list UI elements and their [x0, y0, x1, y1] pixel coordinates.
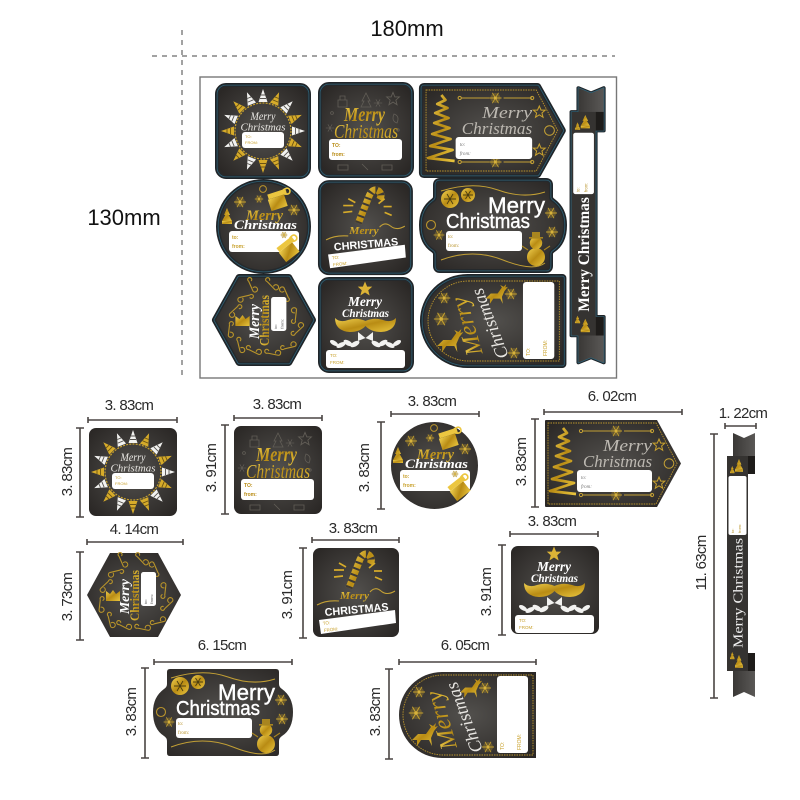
dimension: tree ring width: 3. 83cm	[105, 397, 153, 414]
dimension: round width	[391, 393, 479, 417]
dimension: arch height: 3. 83cm	[367, 688, 384, 736]
sticker: plaque with snowman: Merry	[218, 680, 275, 705]
sheet sticker: long strip	[572, 88, 604, 363]
sheet sticker: gold script square: TO:	[332, 143, 341, 149]
sticker: arch with reindeer: FROM:	[517, 734, 523, 750]
sticker: pentagon tag with ribbon tree	[545, 420, 681, 507]
dimension: round height: 3. 83cm	[356, 444, 373, 492]
sheet sticker: round gifts: from:	[232, 244, 245, 250]
sheet sticker: tree ring: FROM:	[245, 140, 258, 145]
sheet sticker: arch with reindeer	[424, 278, 562, 364]
dimension: pentagon width: 6. 02cm	[588, 388, 636, 405]
dimension: plaque width	[154, 637, 292, 665]
sticker: gold script square: from:	[244, 492, 257, 498]
dimension: round height	[356, 422, 385, 509]
sticker: moustache: Christmas	[531, 571, 578, 585]
dimension: plaque height	[123, 668, 149, 758]
sticker: arch with reindeer: Christmas	[442, 679, 487, 756]
sheet sticker: plaque with snowman: Christmas	[446, 211, 530, 233]
sheet sticker: gold script square: Merry	[343, 104, 385, 126]
dimension: script square width: 3. 83cm	[253, 396, 301, 413]
sheet sticker: arch with reindeer: Merry	[446, 293, 489, 359]
dimension: hexagon width	[87, 521, 183, 545]
sheet sticker: moustache	[322, 281, 410, 369]
panel: full sticker sheet	[200, 77, 616, 378]
sheet sticker: hexagon: Merry	[247, 303, 263, 340]
sticker: candy cane: Merry	[339, 590, 369, 602]
dimension: moustache height	[478, 545, 506, 635]
dimension: moustache width: 3. 83cm	[528, 513, 576, 530]
sticker: long strip: Merry Christmas	[732, 538, 746, 648]
sheet sticker: hexagon	[216, 277, 312, 362]
dimension: hexagon height	[59, 552, 84, 640]
dimension: strip height	[693, 434, 718, 698]
sticker: hexagon: Christmas	[127, 570, 142, 621]
sticker: tree ring: FROM:	[115, 481, 128, 486]
sheet sticker: gold script square: from:	[332, 152, 345, 158]
sheet sticker: plaque with snowman: Merry	[488, 193, 545, 218]
sticker: tree ring: Merry	[120, 450, 146, 464]
sheet sticker: round gifts: Christmas	[234, 217, 297, 232]
sheet sticker: gold script square	[322, 86, 410, 174]
dimension: arch width: 6. 05cm	[441, 637, 489, 654]
dimension: arch width	[399, 637, 536, 665]
sticker: gold script square: Merry	[255, 444, 297, 466]
sticker: pentagon tag with ribbon tree: Merry	[602, 436, 653, 455]
sticker: hexagon: from:	[149, 594, 154, 604]
sticker: round gifts: from:	[403, 483, 416, 489]
sticker: tree ring: TO:	[115, 475, 122, 480]
sheet sticker: tree ring	[219, 87, 307, 175]
dimension: script square height: 3. 91cm	[203, 444, 220, 492]
sticker: long strip: to:	[730, 529, 735, 533]
sticker: round gifts: to:	[403, 474, 410, 480]
sticker: gold script square	[234, 426, 322, 514]
sheet sticker: candy cane: FROM:	[333, 261, 348, 267]
dimension: candy cane height	[279, 548, 307, 638]
sheet sticker: long strip: to:	[575, 187, 581, 192]
sheet sticker: pentagon tag with ribbon tree: Christmas	[462, 119, 532, 138]
dimension: tree ring width	[88, 397, 177, 423]
sticker: arch with reindeer: Merry	[421, 687, 463, 753]
sticker: tree ring	[89, 428, 177, 516]
sheet sticker: tree ring: Christmas	[240, 122, 286, 134]
sheet sticker: hexagon: to:	[273, 324, 278, 329]
sticker: arch with reindeer	[399, 672, 536, 758]
dimension: script square width	[234, 396, 322, 421]
sticker: round gifts: Merry	[416, 447, 454, 463]
sheet sticker: pentagon tag with ribbon tree: Merry	[481, 103, 533, 122]
sheet sticker: moustache: Merry	[347, 295, 383, 310]
dimension: moustache height: 3. 91cm	[478, 568, 495, 616]
sticker: plaque with snowman: Christmas	[176, 698, 260, 720]
sticker: gold script square: TO:	[244, 483, 253, 489]
sticker: candy cane: FROM:	[324, 626, 339, 633]
sheet sticker: hexagon: Christmas	[257, 295, 272, 346]
sticker: moustache	[511, 546, 599, 634]
sheet sticker: pentagon tag with ribbon tree: from:	[460, 150, 471, 157]
sticker: candy cane: TO:	[323, 620, 330, 626]
sheet sticker: tree ring: Merry	[250, 109, 276, 123]
sheet sticker: candy cane: CHRISTMAS	[333, 236, 399, 254]
sticker: moustache: Merry	[536, 560, 572, 575]
sheet sticker: candy cane: TO:	[332, 255, 340, 260]
sticker: pentagon tag with ribbon tree: Christmas	[583, 452, 652, 471]
dimension: candy cane width: 3. 83cm	[329, 520, 377, 537]
sticker: plaque with snowman: to:	[178, 722, 183, 727]
sheet sticker: candy cane: Merry	[348, 225, 379, 237]
sticker: hexagon: Merry	[118, 578, 133, 615]
sheet sticker: round gifts: Merry	[245, 208, 283, 224]
sheet sticker: long strip: from:	[583, 183, 589, 192]
sheet sticker: moustache: Christmas	[342, 306, 389, 320]
sheet sticker: round gifts: to:	[232, 235, 239, 241]
dimension: script square height	[203, 425, 229, 514]
sticker: round gifts	[391, 422, 478, 509]
sheet sticker: plaque with snowman	[423, 182, 563, 269]
sticker: moustache: FROM:	[519, 625, 534, 630]
sheet sticker: candy cane	[322, 184, 409, 271]
sticker: gold script square: Christmas	[246, 461, 310, 483]
dimension: moustache width	[510, 513, 598, 537]
sticker: pentagon tag with ribbon tree: to:	[581, 476, 587, 481]
dimension: hexagon height: 3. 73cm	[59, 573, 76, 621]
sheet sticker: tree ring: TO:	[245, 134, 252, 139]
heading: sheet height 130mm: 130mm	[87, 205, 161, 230]
sticker: hexagon	[87, 552, 181, 637]
dimension: round width: 3. 83cm	[408, 393, 456, 410]
sheet sticker: moustache: FROM:	[330, 360, 344, 365]
sheet sticker: arch with reindeer: Christmas	[467, 286, 513, 362]
sheet sticker: arch with reindeer: TO:	[526, 348, 532, 356]
dimension: pentagon height: 3. 83cm	[513, 438, 530, 486]
sticker: plaque with snowman: from:	[178, 731, 189, 736]
sticker: tree ring: Christmas	[110, 462, 156, 474]
dimension: strip width: 1. 22cm	[719, 405, 767, 422]
dimension: hexagon width: 4. 14cm	[110, 521, 158, 538]
sticker: candy cane	[313, 548, 399, 637]
dimension: strip height: 11. 63cm	[693, 535, 710, 590]
sticker: hexagon: to:	[143, 599, 148, 604]
sheet sticker: pentagon tag with ribbon tree: to:	[460, 142, 466, 148]
sheet sticker: moustache: TO:	[330, 353, 337, 358]
sheet sticker: plaque with snowman: from:	[448, 244, 459, 249]
sticker: arch with reindeer: TO:	[500, 742, 506, 750]
sheet sticker: long strip: Merry Christmas	[575, 197, 593, 312]
sheet sticker: round gifts	[220, 183, 307, 270]
sticker: pentagon tag with ribbon tree: from:	[581, 485, 592, 490]
dimension: tree ring height	[59, 428, 84, 517]
dimension: candy cane width	[312, 520, 399, 543]
sticker: round gifts: Christmas	[405, 456, 468, 471]
dimension: pentagon height	[513, 419, 539, 507]
dimension: candy cane height: 3. 91cm	[279, 571, 296, 619]
sticker: candy cane: CHRISTMAS	[324, 601, 389, 619]
sticker: long strip	[727, 433, 755, 697]
dimension: plaque height: 3. 83cm	[123, 688, 140, 736]
dimension: arch height	[367, 669, 393, 759]
dimension: tree ring height: 3. 83cm	[59, 448, 76, 496]
sheet sticker: hexagon: from:	[279, 319, 284, 329]
heading: sheet width 180mm: 180mm	[370, 16, 444, 41]
sheet sticker: arch with reindeer: FROM:	[543, 340, 549, 356]
sheet sticker: plaque with snowman: to:	[448, 235, 453, 240]
dimension: pentagon width	[544, 388, 682, 415]
dimension: plaque width: 6. 15cm	[198, 637, 246, 654]
sticker: moustache: TO:	[519, 618, 526, 623]
sticker: plaque with snowman	[153, 669, 293, 756]
sticker: long strip: from:	[737, 524, 742, 533]
sheet sticker: gold script square: Christmas	[334, 121, 398, 143]
sheet sticker: pentagon tag with ribbon tree	[423, 87, 562, 174]
